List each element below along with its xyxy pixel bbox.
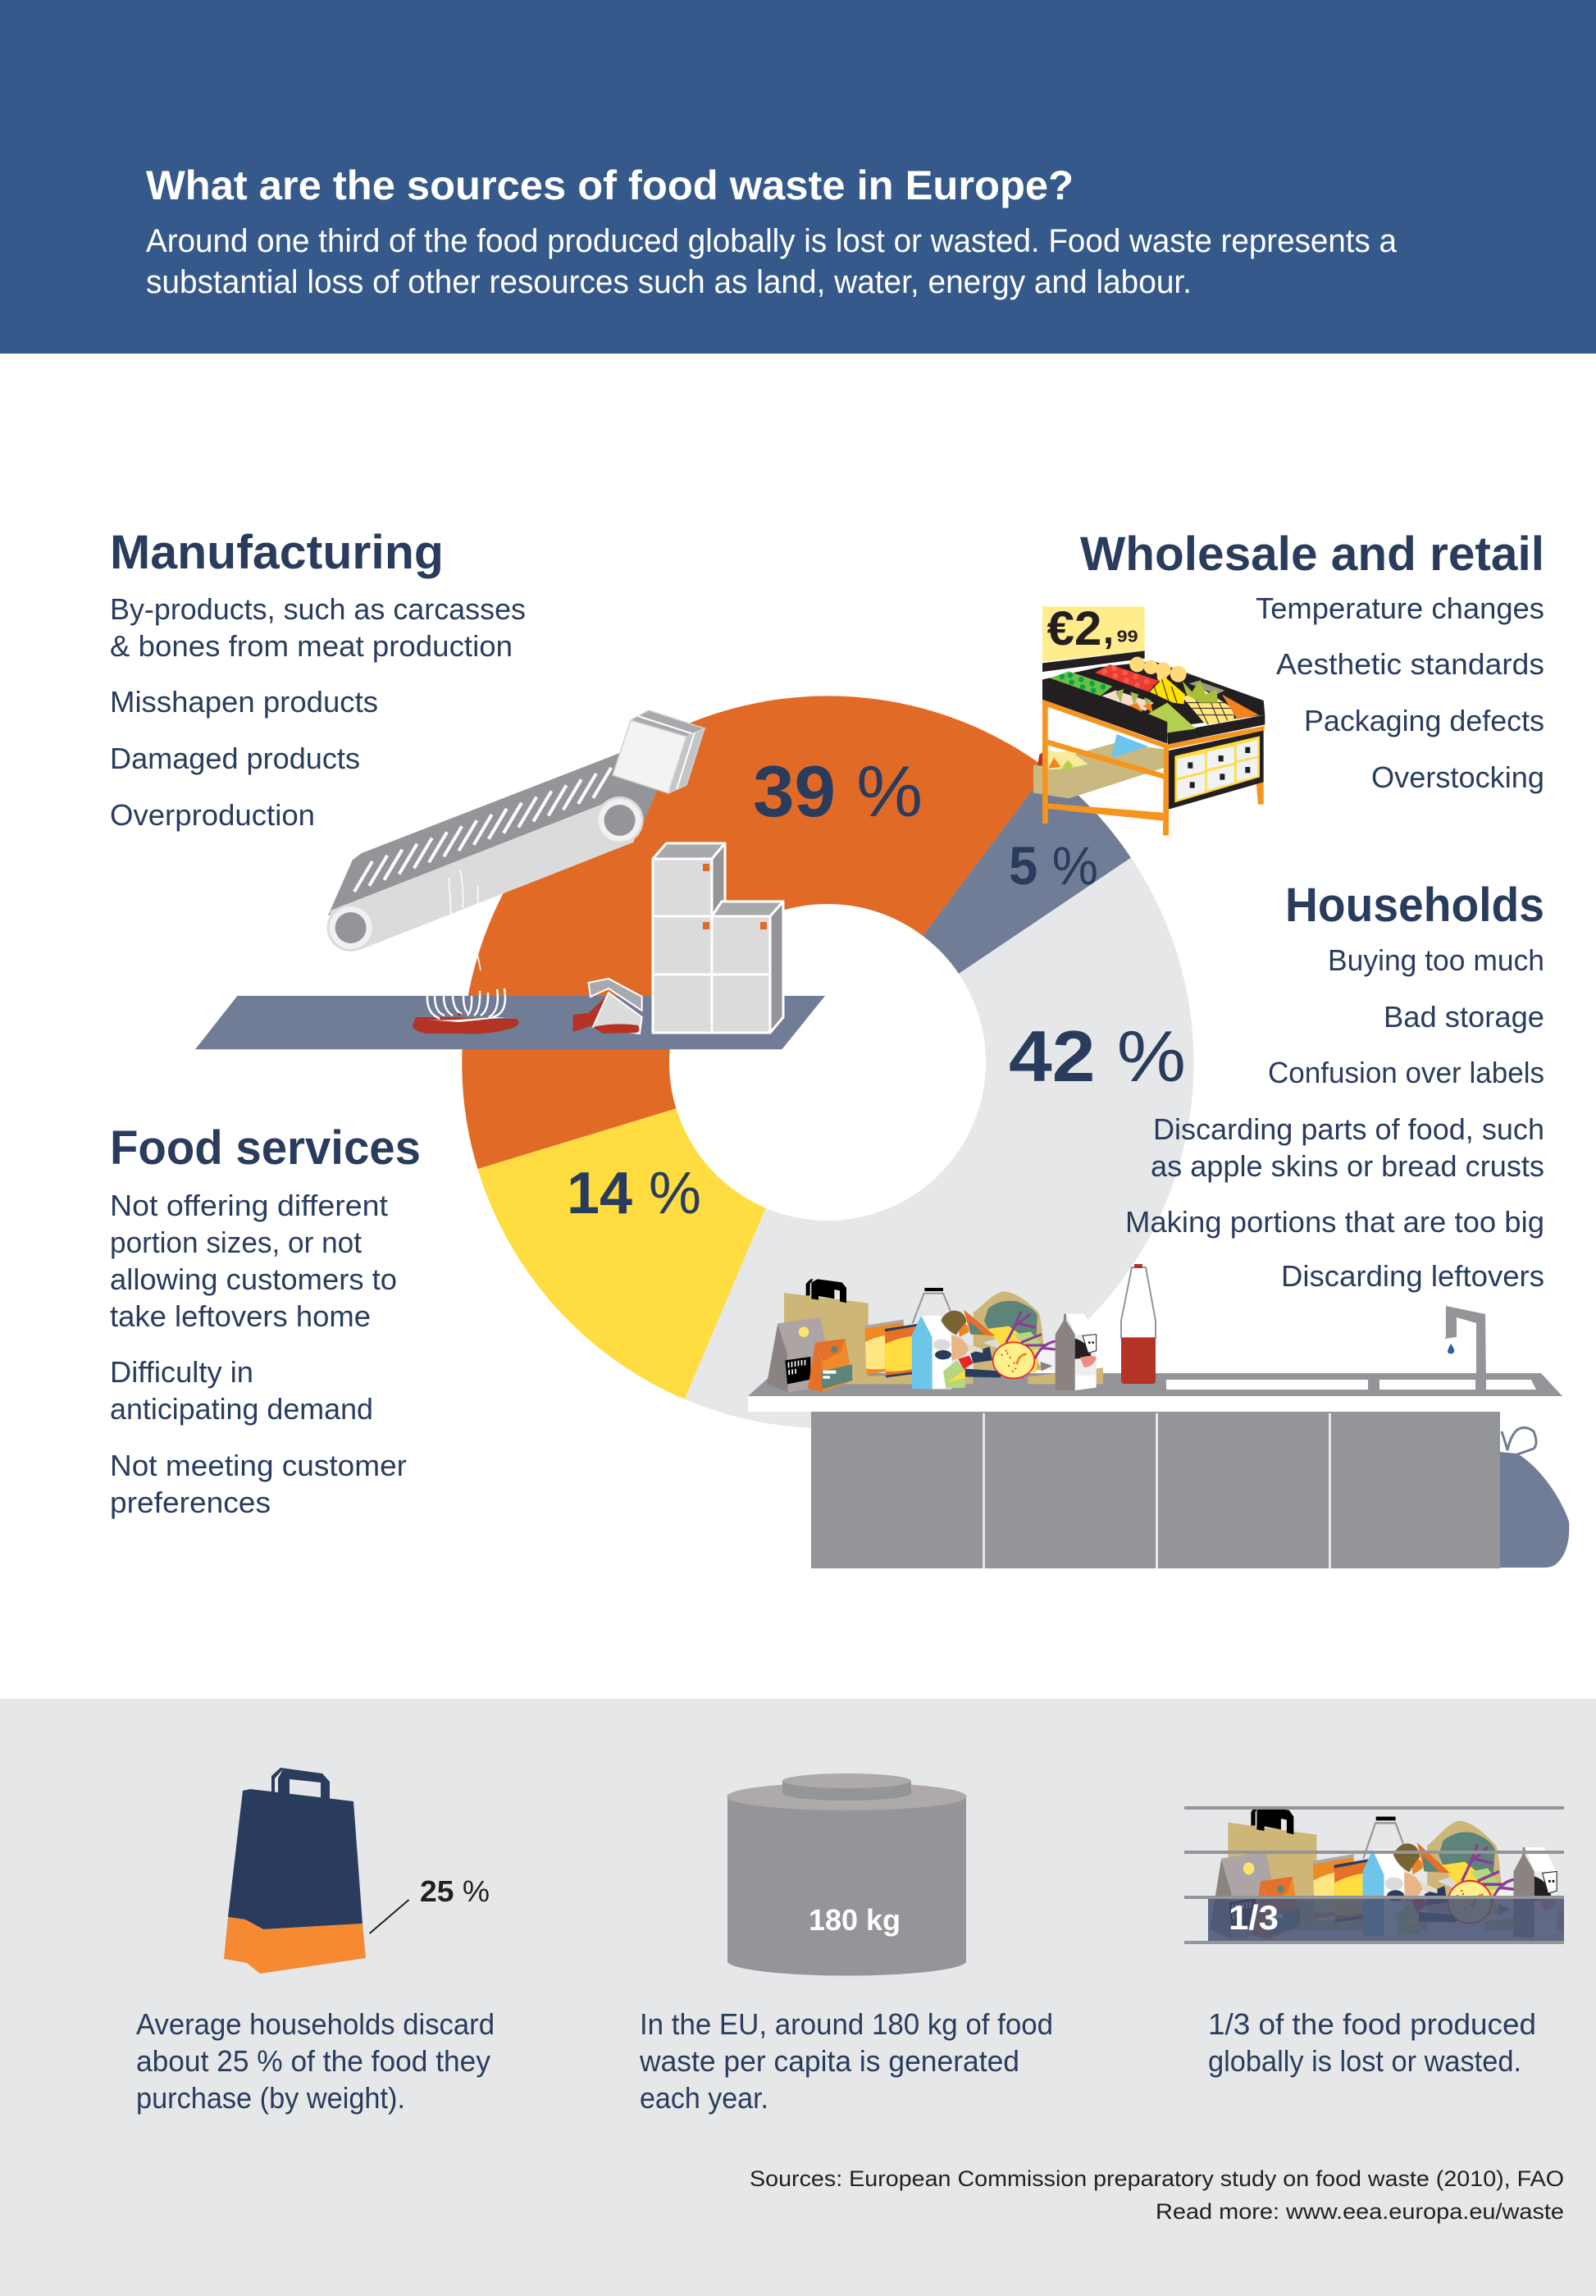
- list: households causes: Discarding parts of food, such: [1153, 1112, 1544, 1146]
- heading: food services: Food services: [110, 1121, 421, 1175]
- water drop: [1448, 1344, 1454, 1353]
- illustration: factory conveyor and boxes: [195, 710, 825, 1049]
- fact text: 180 kg: waste per capita is generated: [639, 2044, 1019, 2078]
- percentage: 5 %: 5 %: [1009, 835, 1098, 896]
- counter top: [748, 1373, 1562, 1396]
- header banner: [0, 0, 1596, 354]
- list: food services causes: [110, 1189, 407, 1519]
- list: wholesale causes: Aesthetic standards: [1276, 647, 1544, 681]
- heading: manufacturing: Manufacturing: [110, 526, 444, 579]
- tray: [1042, 661, 1265, 728]
- donut chart: [462, 696, 1194, 1428]
- list: food services causes: Difficulty in: [110, 1355, 253, 1389]
- drawers: [1169, 731, 1264, 810]
- cans: [864, 1320, 920, 1377]
- icon: one third of groceries: [1184, 1806, 1564, 1944]
- segment: wholesale and retail 5%: [923, 769, 1131, 974]
- panel: wholesale and retail text: [1080, 527, 1544, 794]
- list: wholesale causes: Overstocking: [1371, 760, 1544, 794]
- list: manufacturing causes: Misshapen products: [110, 685, 378, 719]
- price: 99: [1117, 628, 1138, 646]
- percentage: 42 %: 42 %: [1009, 1016, 1186, 1097]
- list: food services causes: allowing customers to: [110, 1262, 397, 1296]
- heading: households: Households: [1285, 879, 1544, 932]
- legs and frame: [1042, 700, 1265, 835]
- intro text: Around one third of the food produced globally is lost or wasted. Food waste represents a: [146, 223, 1398, 259]
- bottom panel: key facts: [0, 1699, 1596, 2296]
- damaged box: [573, 979, 642, 1034]
- list: food services causes: Not offering different: [110, 1189, 388, 1222]
- price: [1047, 602, 1138, 655]
- cow carton: [1056, 1314, 1097, 1390]
- coffee bag: [767, 1317, 828, 1392]
- list: households causes: [1125, 943, 1544, 1293]
- sources: Sources: European Commission preparatory study on food waste (2010), FAO: [750, 2166, 1564, 2191]
- list: households causes: Buying too much: [1328, 943, 1544, 977]
- fact text: 25 %: Average households discard: [136, 2007, 495, 2041]
- stacked boxes: [653, 843, 783, 1033]
- segment: manufacturing 39%: [462, 696, 1048, 1169]
- conveyor belt: [327, 753, 658, 970]
- list: manufacturing causes: Damaged products: [110, 742, 360, 775]
- fact text: 25 %: [136, 2007, 495, 2115]
- intro text: substantial loss of other resources such as land, water, energy and labour.: [146, 264, 1192, 300]
- list: wholesale causes: Packaging defects: [1304, 704, 1544, 737]
- bottle: [1121, 1264, 1156, 1384]
- list: manufacturing causes: By-products, such as carcasses: [110, 592, 526, 626]
- segment: food services 14%: [477, 1108, 766, 1399]
- value: 1/3: 1/3: [1229, 1898, 1279, 1937]
- segment: households 42%: [685, 858, 1194, 1428]
- illustration: market stall: [1033, 602, 1265, 835]
- sink: [1166, 1380, 1536, 1390]
- list: food services causes: Not meeting customer: [110, 1449, 407, 1482]
- sources: [750, 2166, 1564, 2224]
- list: wholesale causes: Temperature changes: [1256, 591, 1544, 625]
- platform: [195, 996, 825, 1049]
- list: households causes: Making portions that are too big: [1125, 1205, 1544, 1239]
- percentage: 14 %: 14 %: [567, 1161, 701, 1226]
- icon: weight 180 kg: [727, 1773, 966, 1976]
- list: manufacturing causes: Overproduction: [110, 798, 315, 832]
- cabinet: [811, 1412, 1500, 1568]
- fact text: 1/3: globally is lost or wasted.: [1208, 2044, 1521, 2078]
- list: food services causes: anticipating demand: [110, 1392, 373, 1426]
- icon: shopping bag 25 %: [224, 1768, 490, 1974]
- list: manufacturing causes: [110, 592, 526, 832]
- milk carton: [912, 1316, 951, 1389]
- value: 25 %: 25 %: [420, 1874, 490, 1908]
- panel: manufacturing text: [110, 526, 526, 832]
- fact text: 1/3: 1/3 of the food produced: [1208, 2007, 1536, 2041]
- meat and bones: [413, 988, 519, 1034]
- list: food services causes: portion sizes, or not: [110, 1226, 362, 1259]
- fruit: [1050, 657, 1259, 733]
- fact text: 180 kg: [639, 2007, 1053, 2115]
- fact text: 25 %: about 25 % of the food they: [136, 2044, 490, 2078]
- intro text: [146, 223, 1398, 300]
- panel: households text: [1125, 879, 1544, 1293]
- list: households causes: Discarding leftovers: [1281, 1259, 1544, 1293]
- list: households causes: Bad storage: [1384, 1000, 1544, 1034]
- orange packet: [808, 1339, 852, 1392]
- heading: wholesale and retail: Wholesale and retail: [1080, 527, 1544, 581]
- title: What are the sources of food waste in Europe?: [146, 162, 1074, 208]
- sign: [1042, 606, 1145, 662]
- groceries: [767, 1279, 1103, 1392]
- list: wholesale causes: [1256, 591, 1544, 794]
- list: households causes: as apple skins or bread crusts: [1151, 1149, 1544, 1183]
- panel: food services text: [110, 1121, 421, 1519]
- value: 180 kg: 180 kg: [809, 1903, 901, 1937]
- sources: Read more: www.eea.europa.eu/waste: [1156, 2199, 1564, 2224]
- illustration: kitchen counter: [748, 1264, 1569, 1568]
- list: manufacturing causes: & bones from meat production: [110, 629, 513, 663]
- food heap: [941, 1310, 1056, 1389]
- price: ,: [1103, 609, 1114, 651]
- faucet: [1444, 1306, 1486, 1386]
- fact text: 180 kg: each year.: [640, 2081, 768, 2115]
- box on conveyor: [613, 710, 705, 793]
- trash bag: [1500, 1427, 1569, 1568]
- list: households causes: Confusion over labels: [1268, 1056, 1544, 1089]
- fact text: 1/3: [1208, 2007, 1536, 2078]
- list: food services causes: preferences: [110, 1486, 271, 1519]
- paper bag: [784, 1279, 1103, 1384]
- price: €2: [1047, 602, 1101, 655]
- list: food services causes: take leftovers home: [110, 1299, 371, 1333]
- percentage: 39 %: 39 %: [753, 751, 923, 832]
- fact text: 25 %: purchase (by weight).: [136, 2081, 405, 2115]
- fact text: 180 kg: In the EU, around 180 kg of food: [640, 2007, 1053, 2041]
- crate: [1033, 743, 1165, 798]
- bottle outline: [913, 1288, 951, 1323]
